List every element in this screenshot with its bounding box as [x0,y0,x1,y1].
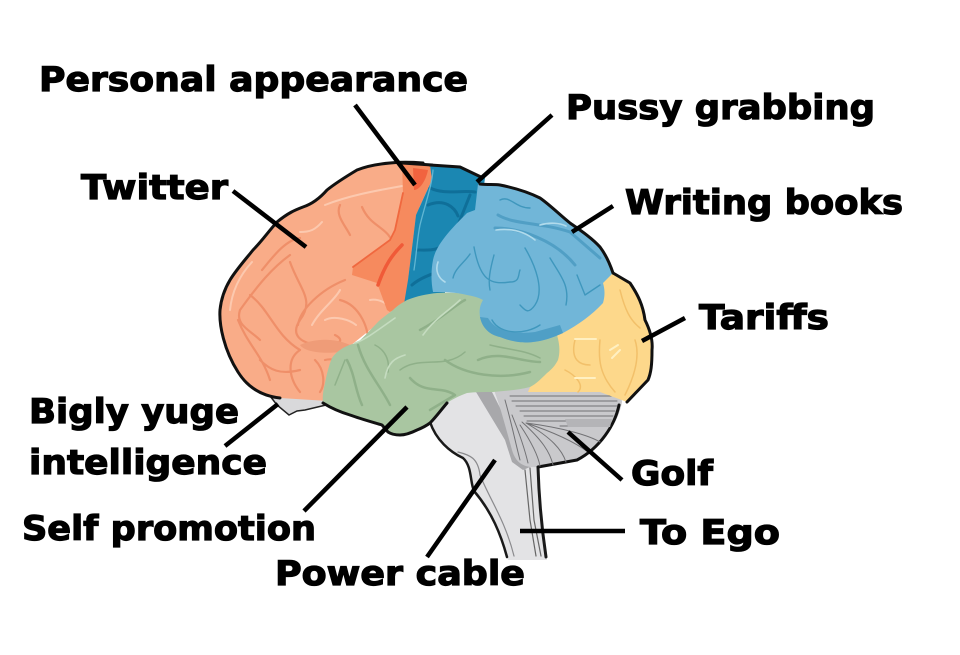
olfactory bulb [270,394,326,415]
leader line: tariffs [642,318,685,341]
leader line: pussy grabbing [477,115,552,182]
frontal-parietal dark band: dark blue [404,165,485,304]
leader line: to ego [520,529,625,533]
motor cortex: orange [352,163,432,312]
leader line: self promotion [304,407,407,511]
label: Writing books [572,183,903,232]
label: Twitter [81,168,306,247]
label: Twitter: Twitter [81,168,228,208]
label: Tariffs [642,298,829,341]
cerebellum [492,385,622,467]
label: Bigly yuge intelligence: intelligence [29,443,267,483]
leader line: twitter [233,191,306,247]
leader line: golf [568,432,622,480]
label: Pussy grabbing: Pussy grabbing [566,88,875,128]
parietal lobe: light blue [432,184,613,342]
leader line: writing books [572,206,613,232]
leader line: bigly yuge intelligence [225,404,278,446]
label: Self promotion [22,407,407,549]
label: Pussy grabbing [477,88,875,182]
label: Golf [568,432,714,494]
label: Self promotion: Self promotion [22,509,316,549]
frontal lobe: salmon [220,162,423,401]
occipital lobe: yellow [528,270,652,402]
brain stem [428,385,547,560]
label: Power cable: Power cable [275,554,525,594]
label: Bigly yuge intelligence: Bigly yuge [29,392,239,432]
label: Writing books: Writing books [625,183,903,223]
brain illustration [220,162,652,560]
temporal lobe: green [323,293,559,435]
label: Power cable [275,460,525,594]
leader line: personal appearance [355,105,415,185]
label: Golf: Golf [631,454,714,494]
label: To Ego: To Ego [640,513,780,553]
label: Personal appearance [39,60,468,185]
label: Personal appearance: Personal appearance [39,60,468,100]
label: Bigly yuge intelligence [29,392,278,483]
leader line: power cable [427,460,495,557]
label: Tariffs: Tariffs [699,298,829,338]
